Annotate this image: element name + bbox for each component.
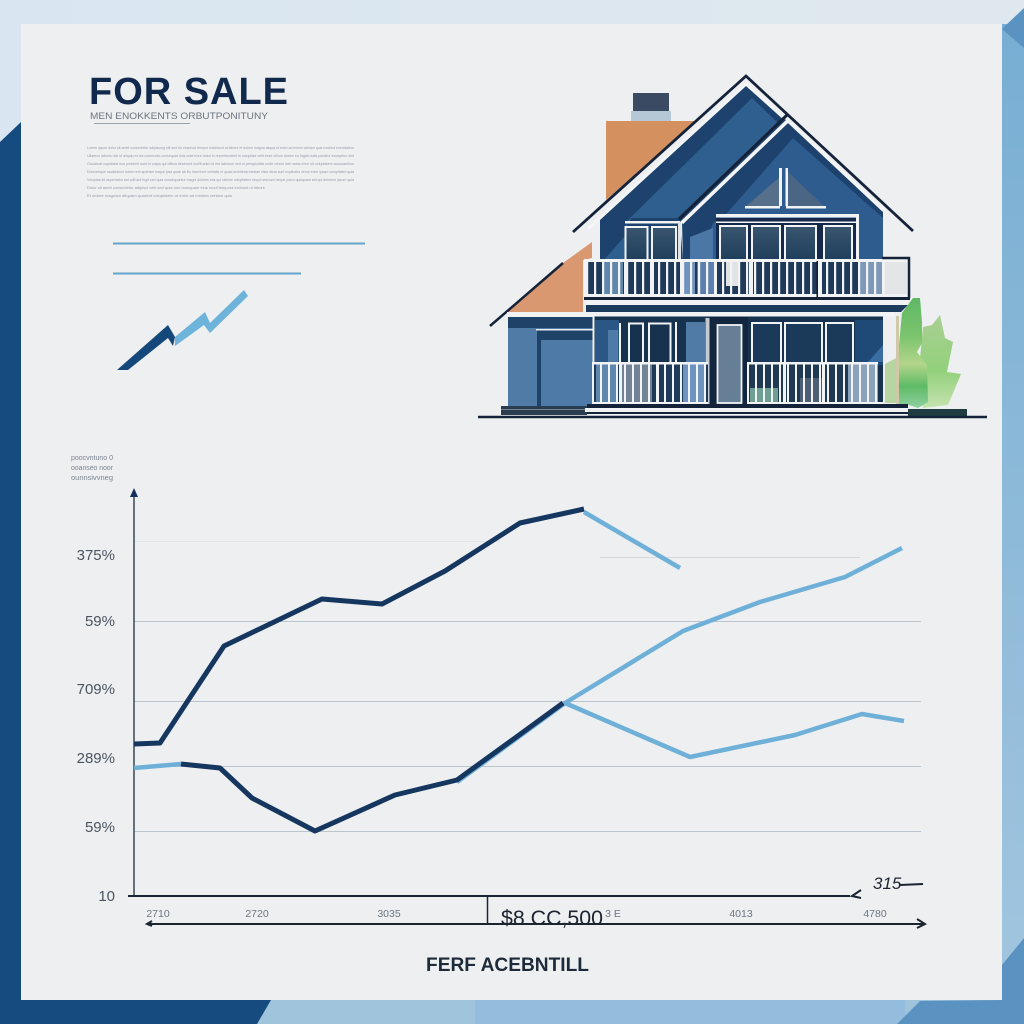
floor beam bbox=[507, 297, 910, 316]
body text block: Occaecat cupidatat non proident sunt in culpa qui officia deserunt mollit anim id est laborum sed ut perspiciatis unde omnis iste natus error sit voluptatem accusantium bbox=[87, 162, 354, 166]
y axis labels: 709% bbox=[77, 681, 115, 698]
body text block: Et dolore magnam aliquam quaerat voluptatem ut enim ad minima veniam quis bbox=[87, 194, 232, 198]
title: FOR SALE bbox=[89, 71, 288, 113]
x axis labels: 3035 bbox=[377, 908, 401, 920]
lower left roof bbox=[507, 242, 592, 312]
y axis labels: 289% bbox=[77, 750, 115, 767]
body text block: Ullamco laboris nisi ut aliquip ex ea commodo consequat duis aute irure dolor in reprehenderit in voluptate velit esse cillum dolore eu fugiat nulla pariatur excepteur sint bbox=[87, 154, 354, 158]
front door bbox=[706, 317, 748, 405]
year callout: 315 bbox=[873, 874, 902, 893]
main gable wall bbox=[600, 85, 786, 260]
subtitle underline bbox=[94, 122, 190, 124]
y axis bbox=[130, 488, 138, 896]
y axis labels: 59% bbox=[85, 819, 115, 836]
roof lines bbox=[573, 76, 913, 232]
footer label: FERF ACEBNTILL bbox=[426, 955, 589, 976]
legend note: ounnsivvneg bbox=[71, 475, 113, 482]
dark blue series bbox=[134, 509, 584, 831]
line chart bbox=[77, 488, 925, 930]
subtitle: MEN ENOKKENTS ORBUTPONITUNY bbox=[90, 111, 269, 122]
x axis labels: 2710 bbox=[146, 908, 170, 920]
plant bbox=[885, 298, 961, 408]
y axis labels: 10 bbox=[98, 888, 115, 905]
body text block: Doloremque laudantium totam rem aperiam eaque ipsa quae ab illo inventore veritatis et quasi architecto beatae vitae dicta sunt explicabo nemo enim ipsam voluptatem quia bbox=[87, 170, 354, 174]
y axis labels bbox=[77, 547, 115, 905]
accent line long bbox=[113, 242, 365, 244]
y axis labels: 375% bbox=[77, 547, 115, 564]
x axis labels bbox=[146, 908, 887, 920]
ground line bbox=[478, 416, 987, 418]
ground left balcony bbox=[592, 362, 708, 404]
x axis labels: 4780 bbox=[863, 908, 887, 920]
terracotta chimney wall bbox=[606, 121, 695, 200]
x axis labels: 4013 bbox=[729, 908, 753, 920]
x axis bbox=[128, 890, 925, 928]
x axis labels: 2720 bbox=[245, 908, 269, 920]
icon: rising zigzag arrow bbox=[117, 290, 248, 370]
grid lines bbox=[134, 542, 921, 832]
upper balcony bbox=[584, 258, 910, 298]
body text block bbox=[87, 146, 354, 198]
ground floor left windows bbox=[594, 316, 676, 403]
upper windows bbox=[625, 214, 859, 260]
ground floor wall bbox=[593, 316, 883, 406]
price callout: $8 CC,500 bbox=[501, 907, 603, 930]
garage bbox=[501, 317, 593, 415]
porch steps bbox=[585, 404, 967, 418]
ground floor right windows bbox=[752, 323, 853, 363]
house illustration bbox=[478, 76, 987, 418]
front gable wall bbox=[682, 122, 883, 262]
legend note: poocvntuno 0 bbox=[71, 455, 113, 462]
light blue series bbox=[134, 512, 904, 782]
attic window bbox=[745, 168, 826, 208]
y axis labels: 59% bbox=[85, 613, 115, 630]
legend note: ooanseo noor bbox=[71, 465, 114, 472]
lower left roof edge bbox=[490, 263, 563, 326]
accent line short bbox=[113, 272, 301, 274]
legend note bbox=[71, 455, 114, 482]
body text block: Voluptas sit aspernatur aut odit aut fugit sed quia consequuntur magni dolores eos qui ratione voluptatem sequi nesciunt neque porro quisquam est qui dolorem ipsum quia bbox=[87, 178, 354, 182]
body text block: Lorem ipsum dolor sit amet consectetur adipiscing elit sed do eiusmod tempor incididunt ut labore et dolore magna aliqua ut enim ad minim veniam quis nostrud exercitation bbox=[87, 146, 354, 150]
x axis labels: 3 E bbox=[605, 908, 621, 920]
year callout bbox=[873, 874, 923, 893]
ground right balcony bbox=[747, 362, 883, 404]
body text block: Dolor sit amet consectetur adipisci velit sed quia non numquam eius modi tempora incidunt ut labore bbox=[87, 186, 265, 190]
chimney cap bbox=[631, 93, 671, 121]
